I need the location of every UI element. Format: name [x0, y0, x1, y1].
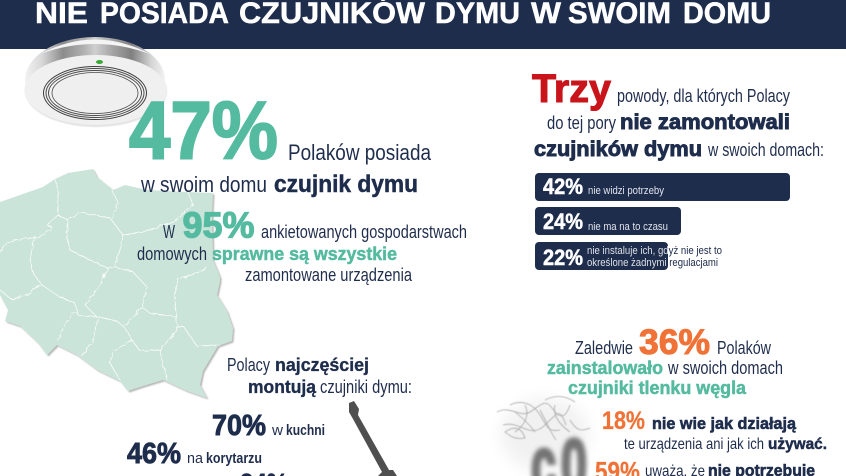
bar: 22% not required by regulations: określone żadnymi regulacjami	[587, 257, 718, 269]
list: rooms with detectors: 46%	[127, 438, 181, 470]
stat: 95% working devices: 95%	[182, 204, 254, 246]
stat: 47% own a smoke detector	[129, 86, 432, 198]
stat: 18% do not know how they work: używać.	[768, 436, 827, 453]
heading: three reasons: powody, dla których Polacy	[617, 86, 790, 106]
icon: CO smoke cloud	[497, 396, 590, 476]
icon: screwdriver	[349, 401, 397, 476]
bar: 42% see no need: nie widzi potrzeby	[588, 185, 664, 197]
bar: 42% see no need: 42%	[543, 174, 583, 199]
bar: 24% have no time: 24%	[543, 209, 583, 234]
bar: 24% have no time: nie ma na to czasu	[588, 221, 668, 233]
heading: where detectors are installed	[227, 355, 412, 397]
stat: 36% carbon monoxide detectors: czujniki tlenku węgla	[568, 378, 747, 398]
icon: smoke detector	[24, 37, 167, 127]
heading: three reasons: do tej pory	[547, 113, 616, 133]
stat: 95% working devices: domowych	[137, 244, 207, 264]
stat: 59% do not need them	[595, 456, 815, 476]
heading: where detectors are installed: najczęściej	[275, 355, 369, 375]
stat: 47% own a smoke detector: czujnik dymu	[274, 171, 418, 198]
heading: three reasons: czujników dymu	[534, 138, 702, 161]
heading: where detectors are installed: Polacy	[227, 355, 270, 375]
list: rooms with detectors: korytarzu	[206, 450, 262, 467]
bar: 24% have no time	[535, 207, 681, 235]
stat: 47% own a smoke detector: w swoim domu	[140, 172, 267, 197]
list: rooms with detectors	[127, 410, 325, 476]
heading: three reasons: nie zamontowali	[620, 111, 790, 134]
stat: 18% do not know how they work: te urządzenia ani jak ich	[624, 436, 764, 453]
stat: 95% working devices	[137, 204, 467, 285]
heading: where detectors are installed: czujniki dymu:	[320, 377, 412, 397]
list: rooms with detectors: na	[187, 450, 204, 467]
stat: 95% working devices: sprawne są wszystkie	[212, 243, 397, 264]
stat: 36% carbon monoxide detectors: w swoich domach	[667, 358, 783, 378]
stat: 18% do not know how they work: 18%	[602, 407, 645, 435]
heading: three reasons	[532, 67, 824, 161]
stat: 36% carbon monoxide detectors	[547, 323, 783, 398]
bar: 22% not required by regulations	[535, 242, 722, 270]
list: rooms with detectors: kuchni	[286, 422, 325, 439]
heading: where detectors are installed: montują	[248, 377, 317, 397]
title	[35, 0, 771, 30]
header banner	[0, 0, 846, 49]
stat: 95% working devices: zamontowane urządzenia	[245, 265, 413, 285]
bar: 42% see no need	[535, 173, 790, 201]
stat: 47% own a smoke detector: 47%	[129, 86, 278, 176]
stat: 18% do not know how they work: nie wie jak działają	[652, 414, 797, 433]
stat: 47% own a smoke detector: Polaków posiada	[288, 140, 432, 165]
stat: 95% working devices: W	[163, 222, 175, 242]
list: rooms with detectors: 70%	[212, 410, 266, 442]
map of Poland	[0, 169, 233, 398]
stat: 36% carbon monoxide detectors: Polaków	[717, 338, 772, 358]
stat: 36% carbon monoxide detectors: 36%	[639, 323, 710, 362]
stat: 36% carbon monoxide detectors: zainstalowało	[547, 358, 663, 378]
stat: 36% carbon monoxide detectors: Zaledwie	[575, 338, 633, 358]
list: rooms with detectors: w	[271, 422, 283, 439]
heading: three reasons: Trzy	[532, 67, 612, 111]
bar: 22% not required by regulations: nie instaluje ich, gdyż nie jest to	[587, 245, 722, 257]
stat: 95% working devices: ankietowanych gospodarstwach	[261, 222, 467, 242]
stat: 18% do not know how they work	[602, 407, 827, 453]
bar: 22% not required by regulations: 22%	[543, 245, 583, 270]
